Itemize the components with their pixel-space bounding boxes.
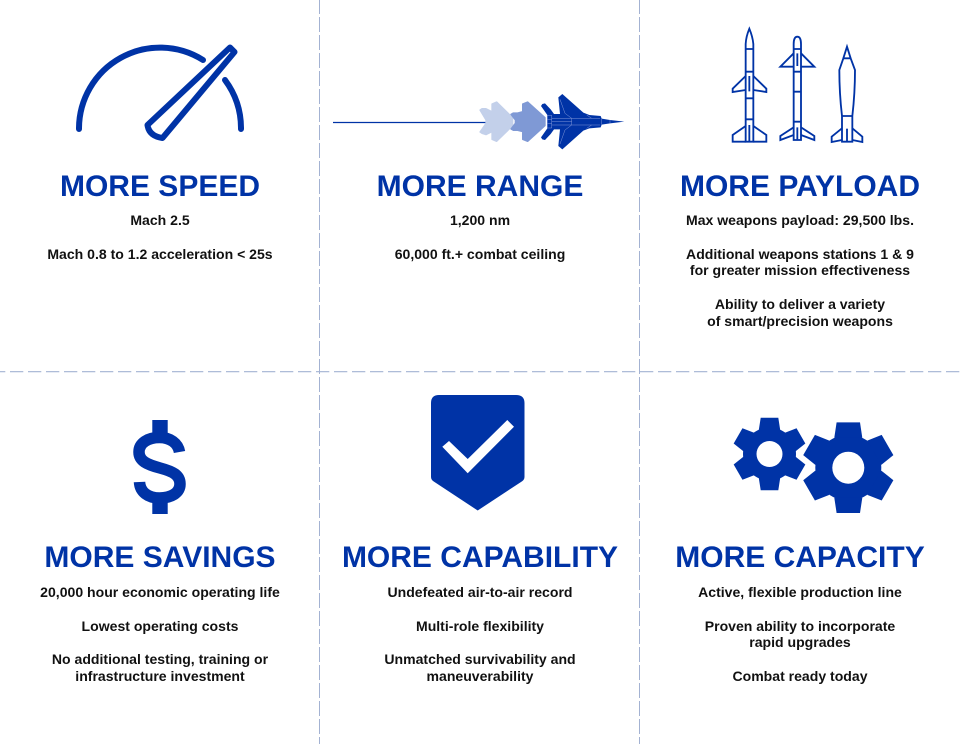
missile three [832,47,862,142]
icon: shield with check mark [431,395,524,510]
text: speed details [47,212,273,262]
text: payload details: for greater mission effectiveness [690,262,910,278]
heading: more capability: MORE CAPABILITY [342,541,618,574]
text: savings details [40,584,280,684]
heading: more speed: MORE SPEED [60,170,260,203]
text: capability details: Undefeated air-to-air record [388,584,572,600]
heading: more capacity: MORE CAPACITY [675,541,925,574]
text: payload details: Additional weapons stations 1 & 9 [686,246,914,262]
icon: speedometer gauge [79,48,241,138]
text: capacity details: Active, flexible production line [698,584,902,600]
text: speed details: Mach 2.5 [130,212,190,228]
large gear [802,422,895,513]
icon: two gears [733,418,895,513]
text: capacity details: Combat ready today [732,668,868,684]
icon: dollar sign [139,420,180,514]
text: payload details: Ability to deliver a variety [715,296,885,312]
text: savings details: 20,000 hour economic operating life [40,584,280,600]
text: capability details: maneuverability [427,668,533,684]
heading: more range: MORE RANGE [377,170,583,203]
text: payload details: Max weapons payload: 29,500 lbs. [686,212,914,228]
text: payload details: of smart/precision weapons [707,313,893,329]
heading: more payload: MORE PAYLOAD [680,170,920,203]
text: capability details [384,584,576,684]
text: range details: 60,000 ft.+ combat ceiling [395,246,565,262]
missile two [780,37,814,140]
text: capability details: Unmatched survivability and [384,651,576,667]
small gear [733,418,806,490]
text: capacity details [698,584,902,684]
text: capacity details: rapid upgrades [749,634,851,650]
icon: jet with motion trail [333,94,624,149]
text: speed details: Mach 0.8 to 1.2 acceleration < 25s [47,246,273,262]
text: range details [395,212,565,262]
text: savings details: Lowest operating costs [82,618,238,634]
text: savings details: No additional testing, training or [52,651,268,667]
text: range details: 1,200 nm [450,212,510,228]
text: savings details: infrastructure investment [75,668,245,684]
text: payload details [686,212,914,329]
missile one [733,29,766,142]
text: capacity details: Proven ability to incorporate [705,618,895,634]
icon: three missiles [733,29,862,142]
heading: more savings: MORE SAVINGS [44,541,276,574]
text: capability details: Multi-role flexibility [416,618,544,634]
